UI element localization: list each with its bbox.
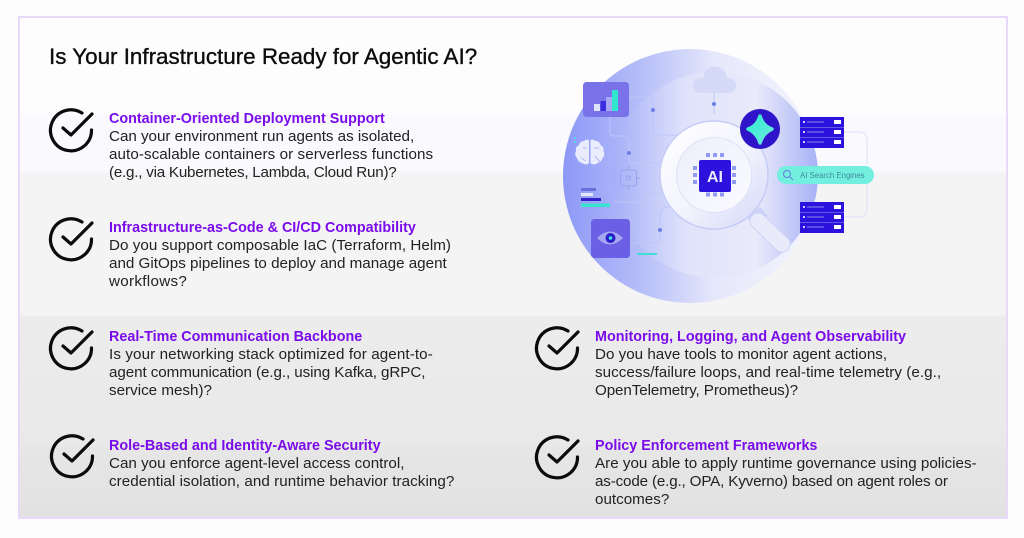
- icon: brain: [574, 137, 604, 164]
- icon: check circle: [50, 434, 95, 478]
- checklist item: IaC and CI/CD: [48, 217, 451, 290]
- connector lines: [610, 92, 714, 243]
- icon: AI chip: AI: [707, 169, 723, 186]
- checklist item: monitoring and observability: OpenTelemetry, Prometheus)?: [595, 382, 798, 399]
- checklist item: real-time communication: agent communication (e.g., using Kafka, gRPC,: [109, 364, 425, 381]
- icon: check circle: [534, 435, 580, 480]
- icon: cloud: [693, 66, 736, 93]
- checklist item: container deployment: Can your environment run agents as isolated,: [109, 128, 414, 145]
- checklist item: policy enforcement: Are you able to apply runtime governance using policies-: [595, 455, 977, 472]
- icon: sparkle badge: [740, 109, 780, 149]
- search pill: [777, 166, 874, 184]
- checklist item: IaC and CI/CD: and GitOps pipelines to deploy and manage agent: [109, 255, 447, 272]
- checklist item: monitoring and observability: [534, 326, 941, 399]
- icon: check circle: [48, 108, 94, 152]
- checklist item: monitoring and observability: success/failure loops, and real-time telemetry (e.g.,: [595, 364, 941, 381]
- checklist item: container deployment: auto-scalable containers or serverless functions: [109, 146, 433, 163]
- accent dash: [637, 253, 657, 255]
- checklist item: role-based security: Can you enforce agent-level access control,: [109, 455, 404, 472]
- icon: AI chip: [693, 153, 736, 196]
- icon: target: [620, 166, 640, 190]
- magnifier lens: [660, 121, 768, 229]
- inner circle: [612, 72, 818, 278]
- checklist item: monitoring and observability: Do you have tools to monitor agent actions,: [595, 346, 887, 363]
- checklist item: IaC and CI/CD: Do you support composable IaC (Terraform, Helm): [109, 237, 451, 254]
- outer circle: [563, 49, 817, 303]
- icon: check circle: [48, 326, 94, 370]
- icon: bar chart tile: [583, 82, 629, 117]
- server connector lines: [844, 132, 867, 217]
- icon: check circle: [48, 217, 94, 262]
- title: Is Your Infrastructure Ready for Agentic AI?: [49, 44, 477, 69]
- checklist item: policy enforcement: as-code (e.g., OPA, Kyverno) based on agent roles or: [595, 473, 948, 490]
- heading: Real-Time Communication Backbone: [109, 329, 362, 345]
- checklist item: real-time communication: Is your networking stack optimized for agent-to-: [109, 346, 433, 363]
- checklist item: policy enforcement: outcomes?: [595, 491, 669, 508]
- checklist item: real-time communication: service mesh)?: [109, 382, 212, 399]
- checklist item: container deployment: (e.g., via Kubernetes, Lambda, Cloud Run)?: [109, 164, 397, 181]
- checklist item: IaC and CI/CD: workflows?: [109, 273, 187, 290]
- illustration: AI search magnifier: [563, 49, 874, 303]
- connector dots: [627, 102, 716, 232]
- heading: Role-Based and Identity-Aware Security: [109, 438, 381, 454]
- magnifier handle: [746, 207, 782, 244]
- heading: Monitoring, Logging, and Agent Observability: [595, 329, 906, 345]
- icon: eye tile: [591, 219, 630, 258]
- icon: check circle: [534, 326, 580, 370]
- heading: Policy Enforcement Frameworks: [595, 438, 817, 454]
- checklist item: real-time communication: [48, 326, 433, 399]
- checklist item: policy enforcement: [534, 435, 977, 508]
- search pill: AI Search Engines: [800, 171, 865, 180]
- checklist item: container deployment: [48, 108, 433, 181]
- checklist item: role-based security: [50, 434, 454, 490]
- icon: server top: [800, 117, 844, 148]
- heading: Container-Oriented Deployment Support: [109, 111, 385, 127]
- list bars: [581, 188, 610, 207]
- checklist item: role-based security: credential isolation, and runtime behavior tracking?: [109, 473, 454, 490]
- icon: server bottom: [800, 202, 844, 233]
- heading: Infrastructure-as-Code & CI/CD Compatibility: [109, 220, 416, 236]
